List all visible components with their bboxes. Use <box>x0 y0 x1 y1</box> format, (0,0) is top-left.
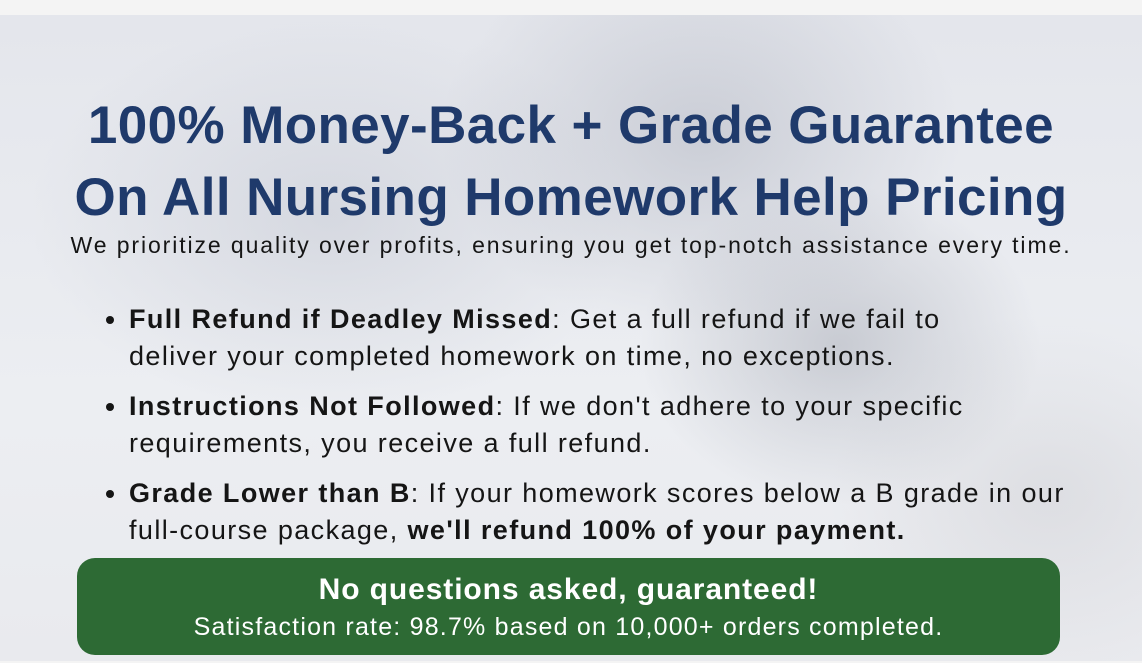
callout: guarantee banner <box>77 558 1060 655</box>
guarantee list: deliver your completed homework on time, no exceptions. <box>129 341 895 371</box>
callout: guarantee banner: No questions asked, guaranteed! <box>319 573 818 606</box>
subtitle: We prioritize quality over profits, ensuring you get top-notch assistance every time. <box>71 232 1071 258</box>
title: 100% Money-Back + Grade Guarantee <box>88 96 1054 155</box>
guarantee list: full-course package, we'll refund 100% of your payment. <box>129 515 906 545</box>
callout: guarantee banner: Satisfaction rate: 98.7% based on 10,000+ orders completed. <box>194 613 943 641</box>
guarantee list: Instructions Not Followed: If we don't adhere to your specific <box>129 391 964 421</box>
guarantee list <box>106 304 1065 545</box>
guarantee list: Full Refund if Deadley Missed: Get a full refund if we fail to <box>129 304 941 334</box>
title <box>74 96 1068 227</box>
guarantee list: requirements, you receive a full refund. <box>129 428 652 458</box>
title: On All Nursing Homework Help Pricing <box>74 168 1068 227</box>
guarantee list: Grade Lower than B: If your homework scores below a B grade in our <box>129 478 1065 508</box>
